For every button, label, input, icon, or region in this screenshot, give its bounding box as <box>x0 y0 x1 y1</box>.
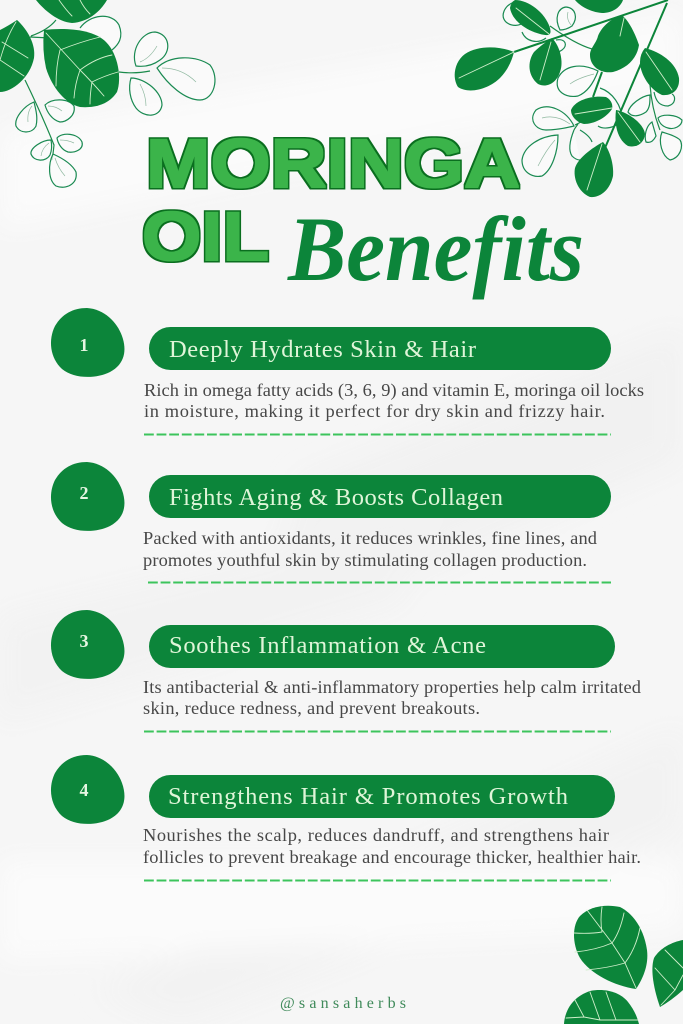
number badge 1 <box>51 308 124 377</box>
number badge 4 <box>51 755 124 824</box>
heading pill 2: Fights Aging & Boosts Collagen <box>169 484 503 511</box>
description 4 <box>143 825 641 867</box>
heading pill 4 <box>149 775 615 818</box>
description 3: skin, reduce redness, and prevent breakouts. <box>143 698 480 718</box>
stems <box>514 0 668 190</box>
description 1: Rich in omega fatty acids (3, 6, 9) and vitamin E, moringa oil locks <box>144 380 644 401</box>
benefit 4 <box>51 755 641 880</box>
number badge 3 <box>51 610 124 679</box>
description 1 <box>144 380 644 421</box>
decoration: bottom-right leaves <box>564 906 683 1024</box>
number badge 4: 4 <box>80 780 88 800</box>
heading pill 1 <box>149 327 611 370</box>
description 3 <box>143 677 641 718</box>
footer handle: @sansaherbs <box>280 995 406 1012</box>
description 2: promotes youthful skin by stimulating collagen production. <box>143 550 587 570</box>
number badge 1: 1 <box>80 335 88 355</box>
benefit 2 <box>51 462 611 582</box>
benefit 1 <box>51 308 644 434</box>
outline leaves <box>503 2 682 176</box>
number badge 3: 3 <box>80 631 88 651</box>
description 2: Packed with antioxidants, it reduces wrinkles, fine lines, and <box>143 528 597 548</box>
solid leaves <box>0 0 119 107</box>
number badge 2 <box>51 462 124 531</box>
title: Benefits script: Benefits <box>287 198 584 300</box>
heading pill 2 <box>149 475 611 518</box>
benefit 3 <box>51 610 641 732</box>
heading pill 3 <box>149 625 615 668</box>
decoration: top-right moringa branch <box>455 0 682 197</box>
decoration: top-left moringa leaves <box>0 0 215 187</box>
heading pill 1: Deeply Hydrates Skin & Hair <box>169 336 476 363</box>
outline leaves <box>16 16 215 187</box>
description 4: follicles to prevent breakage and encourage thicker, healthier hair. <box>143 847 641 867</box>
description 3: Its antibacterial & anti-inflammatory properties help calm irritated <box>143 677 641 697</box>
description 2 <box>143 528 597 570</box>
title: MORINGA: MORINGA <box>146 125 520 202</box>
description 4: Nourishes the scalp, reduces dandruff, and strengthens hair <box>143 825 609 845</box>
title: OIL: OIL <box>142 198 269 275</box>
solid leaves <box>455 0 679 197</box>
description 1: in moisture, making it perfect for dry skin and frizzy hair. <box>144 401 605 421</box>
number badge 2: 2 <box>80 483 88 503</box>
heading pill 3: Soothes Inflammation & Acne <box>169 632 486 659</box>
heading pill 4: Strengthens Hair & Promotes Growth <box>168 783 568 810</box>
